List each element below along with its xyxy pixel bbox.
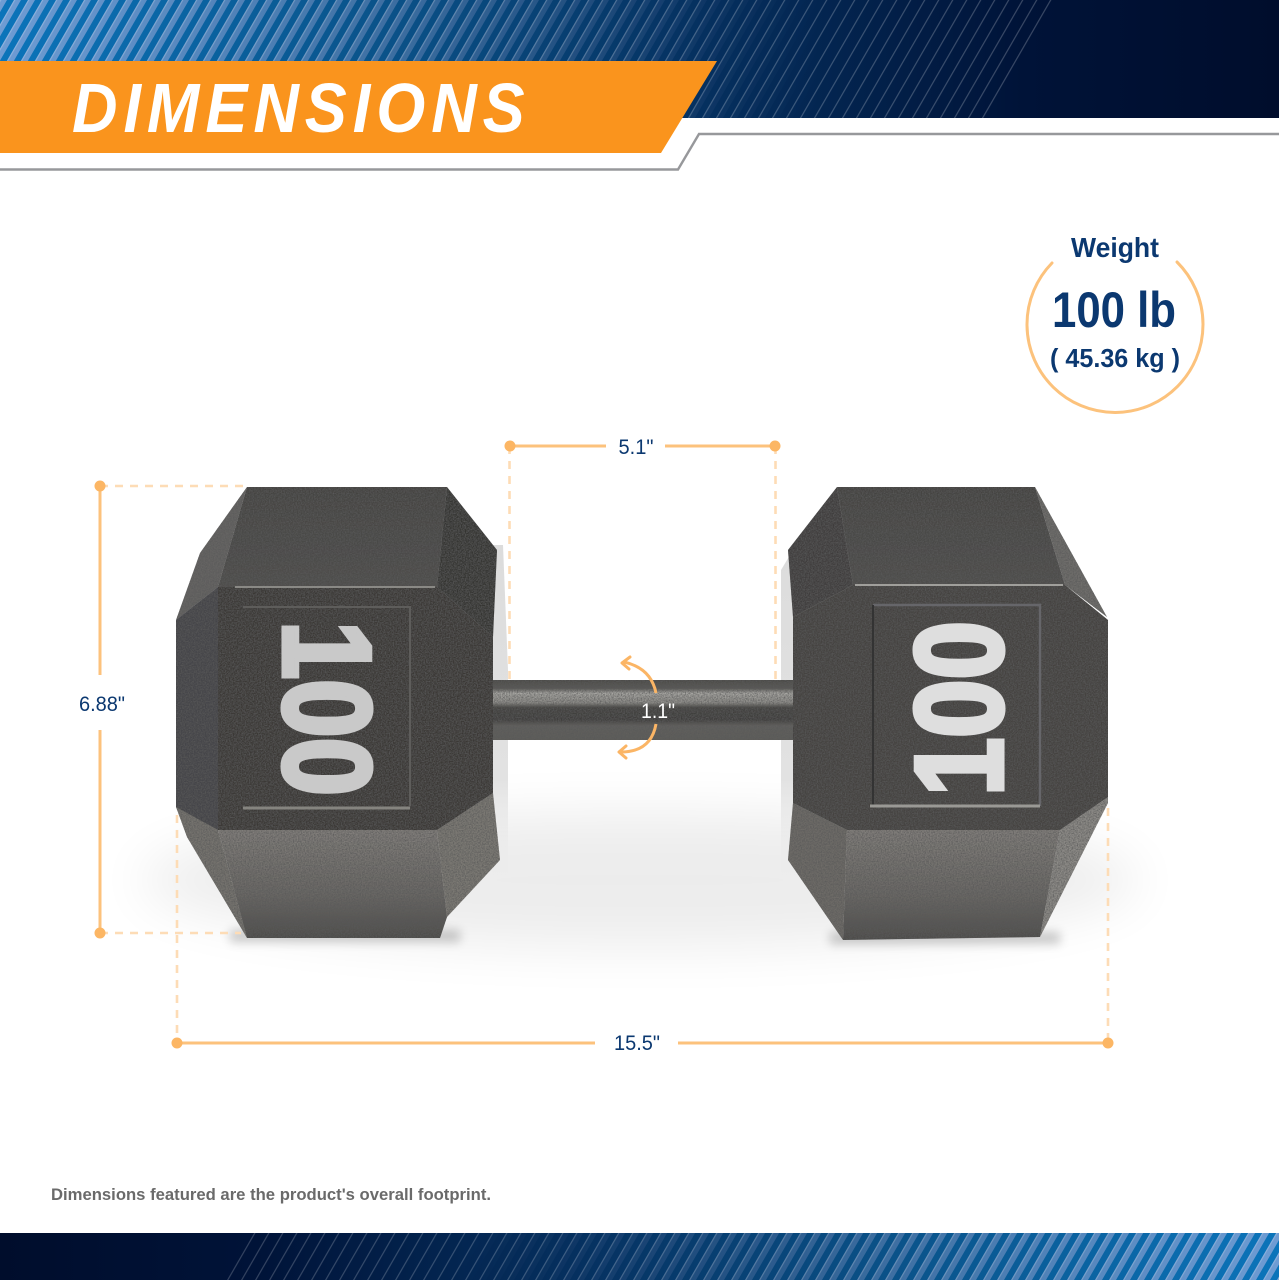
lower right facet xyxy=(1040,797,1108,937)
bottom face xyxy=(218,830,447,938)
lower left facet xyxy=(176,807,247,938)
header band xyxy=(0,0,1279,118)
weight badge: ( 45.36 kg ) xyxy=(1050,345,1180,373)
upper right facet xyxy=(437,487,497,637)
dumbbell right head xyxy=(788,487,1108,940)
dimension: overall length 15.5: 15.5" xyxy=(614,1032,660,1055)
embossed numerals: 100 xyxy=(891,621,1029,796)
top face xyxy=(218,487,447,587)
dashed guides xyxy=(100,446,1108,1043)
bottom face xyxy=(843,830,1060,940)
floor shadow xyxy=(140,812,1140,948)
weight badge: 100 lb xyxy=(1052,282,1176,338)
upper left facet xyxy=(788,487,853,617)
lower right facet xyxy=(437,793,500,917)
dimension: height 6.88: 6.88" xyxy=(79,693,125,716)
embossed numerals: 100 xyxy=(257,621,395,796)
front face xyxy=(218,587,493,830)
dumbbell handle xyxy=(492,680,796,740)
left dark facet xyxy=(176,587,218,830)
footnote: Dimensions featured are the product's overall footprint. xyxy=(51,1186,491,1204)
dimension: handle diameter 1.1 xyxy=(619,657,675,758)
footer band xyxy=(0,1233,1279,1280)
lower left facet xyxy=(788,803,847,940)
inner head faces xyxy=(492,545,796,880)
dumbbell left head xyxy=(176,487,500,938)
upper left facet xyxy=(176,487,247,620)
dimension: handle diameter 1.1: 1.1" xyxy=(641,700,675,723)
top face xyxy=(837,487,1065,585)
upper right facet xyxy=(1035,487,1107,617)
header white edge line xyxy=(0,134,1279,170)
weight badge: Weight xyxy=(1071,232,1159,263)
title banner xyxy=(0,61,717,153)
dimension: height 6.88 xyxy=(79,480,125,938)
title: DIMENSIONS xyxy=(72,70,525,148)
weight badge xyxy=(1027,232,1203,412)
dimension: handle length 5.1: 5.1" xyxy=(618,436,654,459)
dimension: handle length 5.1 xyxy=(504,436,780,459)
dimension: overall length 15.5 xyxy=(172,1032,1114,1055)
front face xyxy=(793,585,1108,830)
